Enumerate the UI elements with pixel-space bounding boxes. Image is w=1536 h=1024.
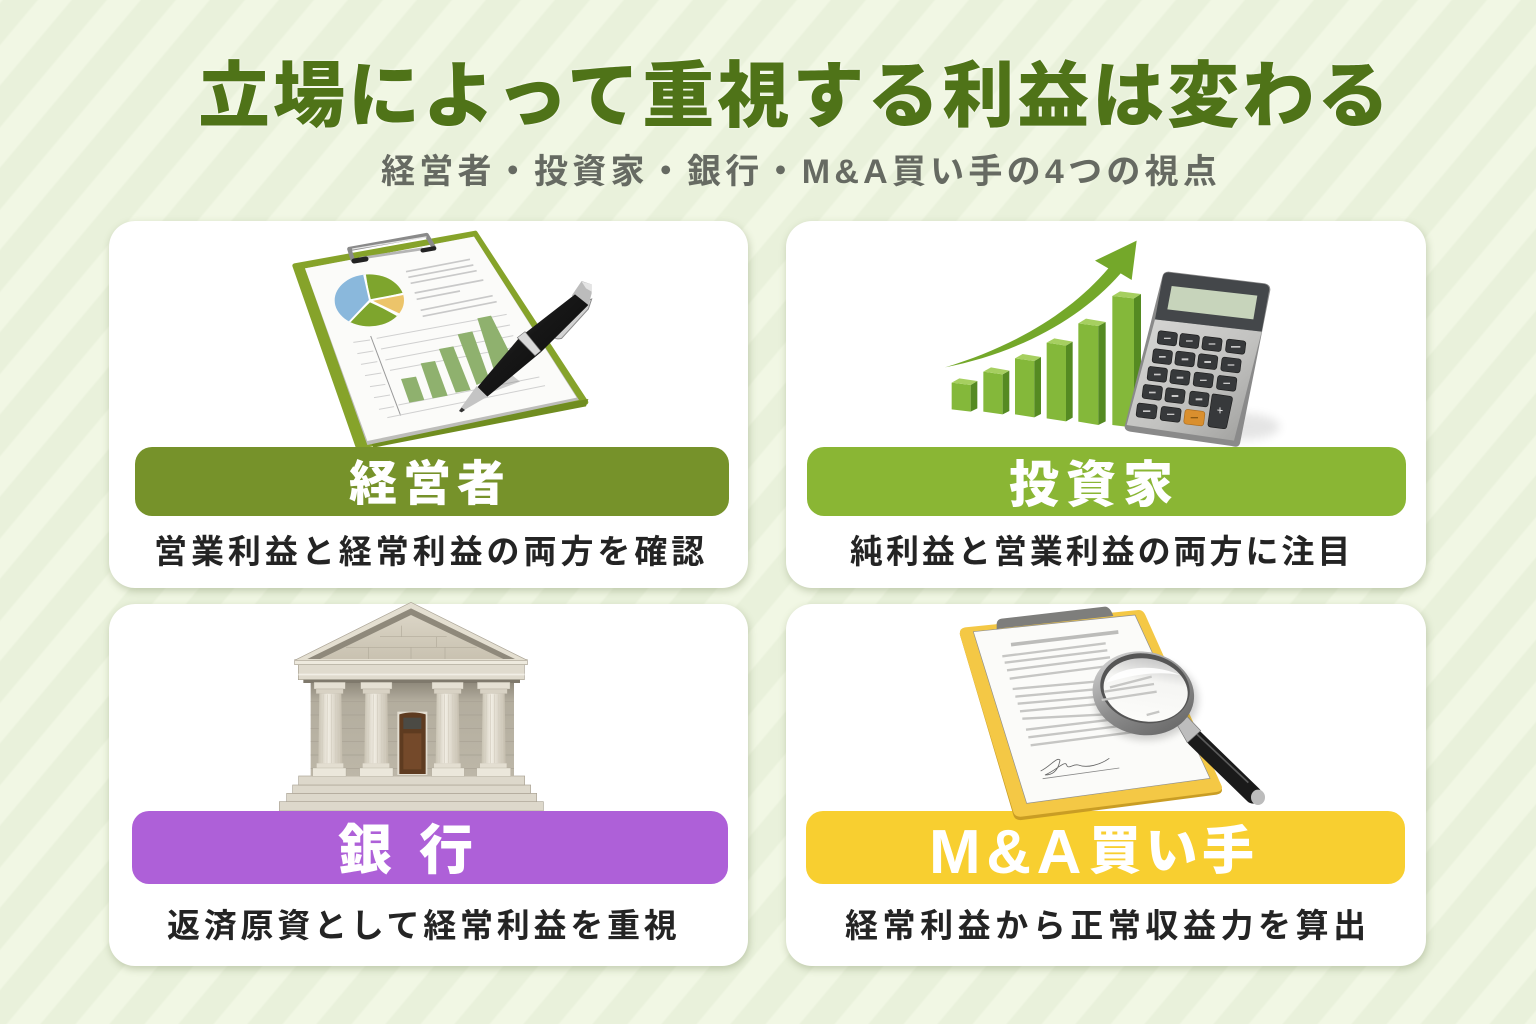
label: 投資家: 投資家 [1009, 457, 1180, 513]
label bar: 銀行 [132, 811, 728, 884]
arrow [945, 241, 1137, 367]
text lines [406, 259, 497, 316]
rising bars [952, 291, 1141, 428]
icon: bank building [279, 602, 544, 811]
icon: clipboard with magnifying glass [960, 606, 1265, 820]
entablature [298, 664, 524, 680]
label bar: M&A買い手 [806, 811, 1405, 884]
calculator [1125, 272, 1280, 447]
pediment [295, 602, 527, 660]
label: 経営者: 経営者 [349, 458, 511, 511]
label bar: 投資家 [807, 447, 1406, 516]
wall [311, 682, 514, 776]
pie chart [334, 274, 404, 326]
pen [459, 281, 592, 412]
magnifier [1086, 643, 1265, 805]
description: 返済原資として経常利益を重視 [167, 907, 681, 944]
clip [997, 607, 1113, 629]
subtitle: 経営者・投資家・銀行・M&A買い手の4つの視点 [381, 153, 1221, 191]
description: 純利益と営業利益の両方に注目 [850, 533, 1353, 570]
description: 営業利益と経常利益の両方を確認 [154, 533, 708, 570]
keypad [1136, 331, 1246, 429]
icon: growth chart and calculator [945, 240, 1280, 447]
label: 銀行: 銀行 [338, 821, 500, 881]
panel: 経営者 [109, 221, 748, 588]
icon: clipboard with report and pen [292, 230, 592, 447]
title: 立場によって重視する利益は変わる [198, 57, 1392, 137]
label: M&A買い手: M&A買い手 [929, 818, 1259, 887]
panel: 投資家 [786, 221, 1426, 588]
label bar: 経営者 [135, 447, 729, 516]
board [960, 611, 1222, 820]
steps [279, 776, 543, 811]
signature [1041, 758, 1109, 775]
panel: 銀行 [109, 604, 748, 966]
columns [313, 682, 511, 776]
panel: M&A買い手 [786, 604, 1426, 966]
bar chart [353, 314, 545, 418]
door [397, 712, 427, 775]
text lines [1002, 632, 1159, 745]
description: 経常利益から正常収益力を算出 [845, 907, 1371, 944]
clip [349, 235, 434, 261]
